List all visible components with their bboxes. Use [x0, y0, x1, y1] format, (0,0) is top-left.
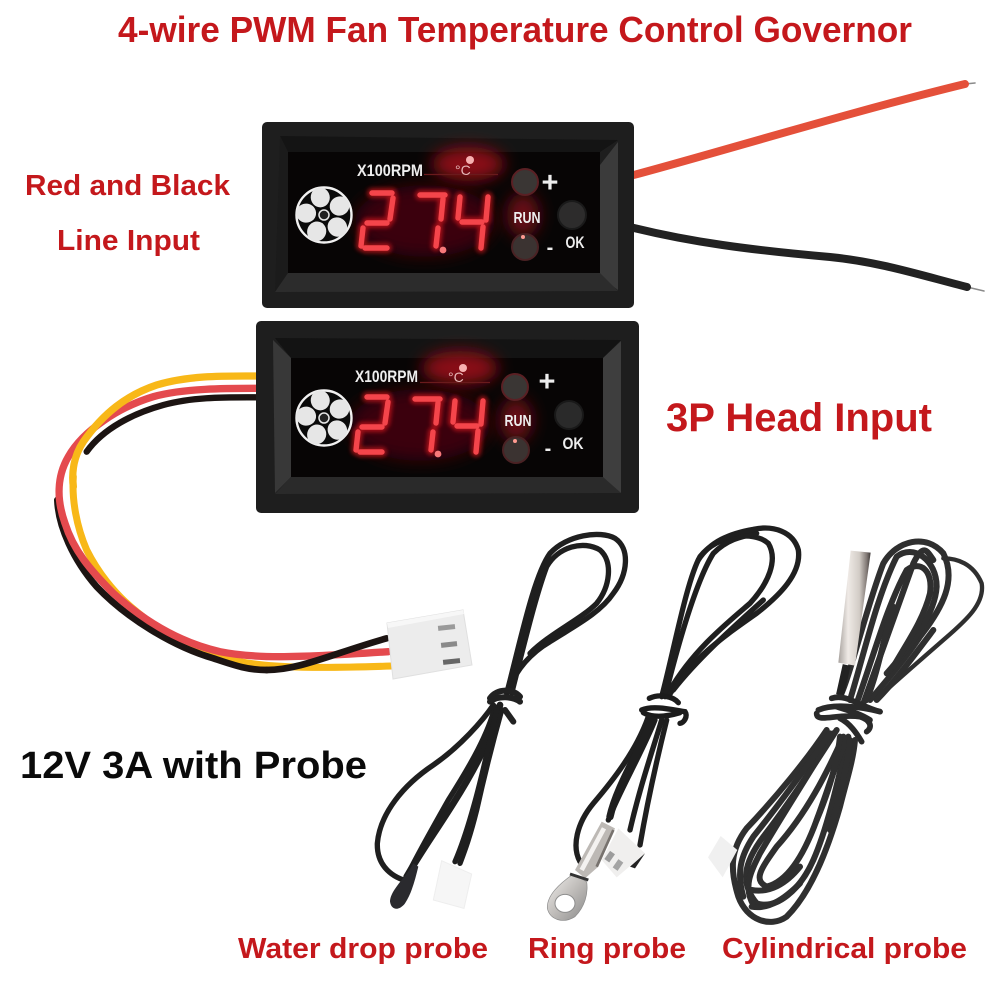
controller 2: 3P head input — [256, 321, 639, 513]
upper wire loops — [507, 534, 625, 693]
black wire, connector end — [267, 638, 387, 670]
buttons and button labels: OK — [566, 233, 585, 252]
buttons and button labels — [502, 366, 584, 463]
caption: cylindrical probe: Cylindrical probe — [722, 933, 967, 965]
metal tube — [838, 551, 871, 666]
seven segment readout 27.4 — [356, 397, 483, 457]
seven segment readout 27.4 — [361, 193, 488, 253]
buttons and button labels: + — [539, 366, 555, 398]
degree indicator: °C — [448, 369, 464, 385]
degree indicator — [448, 364, 467, 385]
lower wire loops — [576, 717, 667, 862]
probe plug — [708, 836, 737, 877]
buttons and button labels: RUN — [514, 210, 540, 227]
X100RPM text: X100RPM — [357, 161, 423, 180]
probe plug — [602, 828, 645, 877]
label: red and black line input — [25, 170, 231, 257]
buttons and button labels: + — [542, 167, 558, 199]
water drop probe — [377, 534, 625, 909]
buttons and button labels — [512, 167, 586, 260]
degree indicator — [455, 156, 474, 178]
lower wire loops — [377, 705, 502, 882]
yellow wire, upper run — [73, 376, 257, 487]
buttons and button labels: - — [545, 438, 551, 460]
cylindrical probe — [708, 541, 982, 922]
knot — [490, 691, 520, 722]
yellow wire, lower run — [73, 477, 392, 667]
buttons and button labels: RUN — [504, 413, 532, 430]
label: 12V 3A with probe: 12V 3A with Probe — [20, 745, 367, 787]
black input wire — [630, 227, 984, 291]
metal barrel — [575, 822, 615, 878]
ring terminal — [547, 874, 587, 920]
upper wire loops — [662, 528, 799, 697]
screen — [291, 358, 603, 477]
red wire — [59, 388, 388, 657]
label: red and black line input: Line Input — [57, 225, 200, 257]
title: 4-wire PWM Fan Temperature Control Governor — [118, 9, 912, 50]
icon: fan — [295, 186, 353, 244]
knot — [817, 697, 880, 742]
screen — [288, 152, 600, 273]
controller 1: line input — [262, 122, 634, 308]
ring probe — [547, 528, 799, 920]
X100RPM text: X100RPM — [355, 367, 418, 386]
knot — [642, 696, 686, 723]
probe tip — [390, 863, 418, 909]
label: red and black line input: Red and Black — [25, 170, 231, 202]
caption: ring probe: Ring probe — [528, 933, 686, 965]
3-pin connector — [387, 610, 472, 679]
black wire, lower run — [57, 500, 267, 670]
icon: fan — [295, 389, 353, 447]
buttons and button labels: - — [547, 237, 553, 259]
caption: water drop probe: Water drop probe — [238, 933, 488, 965]
buttons and button labels: OK — [562, 434, 584, 453]
degree indicator: °C — [455, 162, 471, 178]
case — [256, 321, 639, 513]
lower wire loops — [733, 730, 855, 922]
3-pin cable — [57, 376, 392, 670]
red input wire — [630, 83, 975, 176]
probe plug — [433, 861, 472, 908]
black wire, upper run — [87, 397, 257, 452]
case — [262, 122, 634, 308]
label: 3P head input: 3P Head Input — [666, 396, 932, 440]
upper wire loops — [840, 541, 982, 703]
